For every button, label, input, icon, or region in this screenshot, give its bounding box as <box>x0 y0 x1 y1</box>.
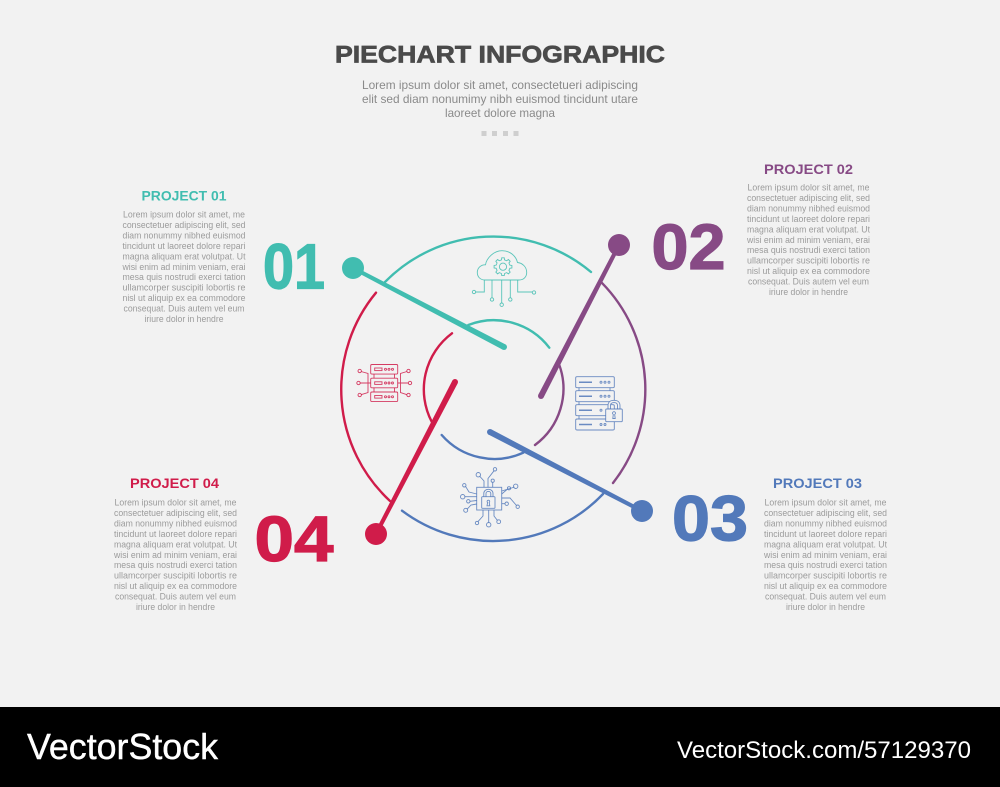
number 04: 04 <box>254 503 334 575</box>
text block: project 02: wisi enim ad minim veniam, erai <box>746 235 870 245</box>
text block: project 03: ullamcorper suscipiti lobortis re <box>764 571 887 581</box>
icon: server network <box>357 364 412 402</box>
blue arcs <box>402 435 603 541</box>
text block: project 03: consectetuer adipiscing elit, sed <box>764 508 887 518</box>
number 01: 01 <box>263 230 325 302</box>
text block: project 03: consequat. Duis autem vel eum <box>765 592 886 602</box>
pagination squares <box>482 131 518 136</box>
text block: project 04: consequat. Duis autem vel eum <box>115 592 236 602</box>
text block: project 04: mesa quis nostrudi exerci tation <box>114 560 237 570</box>
panel: project 03 <box>763 475 888 612</box>
text block: project 02: magna aliquam erat volutpat. Ut <box>747 224 871 234</box>
heading: project 03: PROJECT 03 <box>773 475 862 491</box>
text block: project 01: iriure dolor in hendre <box>144 314 224 324</box>
number 03: 03 <box>672 482 748 554</box>
text block: project 02 <box>746 182 871 297</box>
red arcs <box>341 293 452 501</box>
text block: project 01: Lorem ipsum dolor sit amet, me <box>123 210 245 220</box>
panel: project 04 <box>113 475 238 612</box>
pointer 02 <box>538 234 630 399</box>
text block: project 03: tincidunt ut laoreet dolore repari <box>764 529 887 539</box>
footer logo text: VectorStock <box>27 726 219 767</box>
text block: project 04: iriure dolor in hendre <box>136 602 215 612</box>
text block: project 02: mesa quis nostrudi exerci tation <box>747 245 870 255</box>
text block: project 04: tincidunt ut laoreet dolore repari <box>114 529 237 539</box>
text block: project 01: consequat. Duis autem vel eum <box>124 304 244 314</box>
icon: cloud with gear <box>472 251 536 306</box>
text block: project 01: magna aliquam erat volutpat. Ut <box>122 251 246 261</box>
text block: project 02: ullamcorper suscipiti lobortis re <box>747 256 870 266</box>
text block: project 02: iriure dolor in hendre <box>769 287 848 297</box>
heading: project 04: PROJECT 04 <box>130 475 219 491</box>
text block: project 02: diam nonummy nibhed euismod <box>747 203 870 213</box>
subtitle: Lorem ipsum dolor sit amet, consectetueri adipiscing <box>362 78 638 92</box>
text block: project 04: wisi enim ad minim veniam, erai <box>113 550 237 560</box>
text block: project 04: magna aliquam erat volutpat. Ut <box>114 539 238 549</box>
text block: project 03: Lorem ipsum dolor sit amet, me <box>764 498 887 508</box>
text block: project 03: iriure dolor in hendre <box>786 602 865 612</box>
text block: project 02: consectetuer adipiscing elit, sed <box>747 193 870 203</box>
text block: project 04: Lorem ipsum dolor sit amet, me <box>114 498 237 508</box>
text block: project 04: nisl ut aliquip ex ea commodore <box>114 581 237 591</box>
piechart rings <box>341 237 645 541</box>
number 02: 02 <box>652 211 726 283</box>
text block: project 03: wisi enim ad minim veniam, erai <box>763 550 887 560</box>
subtitle <box>362 78 638 120</box>
title: PIECHART INFOGRAPHIC <box>335 41 665 68</box>
panel: project 01 <box>122 188 246 324</box>
text block: project 01: tincidunt ut laoreet dolore repari <box>122 241 246 251</box>
text block: project 01: wisi enim ad minim veniam, erai <box>122 262 246 272</box>
text block: project 02: tincidunt ut laoreet dolore repari <box>747 214 870 224</box>
text block: project 02: consequat. Duis autem vel eum <box>748 277 869 287</box>
text block: project 03: diam nonummy nibhed euismod <box>764 518 887 528</box>
panel: project 02 <box>746 161 871 297</box>
purple arcs <box>535 283 645 483</box>
text block: project 03: nisl ut aliquip ex ea commodore <box>764 581 887 591</box>
heading: project 01: PROJECT 01 <box>142 188 227 204</box>
pointer 04 <box>365 379 458 545</box>
icon: locked server stack <box>576 377 622 430</box>
footer bar <box>0 707 1000 787</box>
text block: project 01: mesa quis nostrudi exerci tation <box>122 272 246 282</box>
footer url text: VectorStock.com/57129370 <box>677 737 971 764</box>
text block: project 03: mesa quis nostrudi exerci tation <box>764 560 887 570</box>
icon: circuit padlock <box>460 468 519 527</box>
subtitle: laoreet dolore magna <box>445 106 555 120</box>
subtitle: elit sed diam nonumimy nibh euismod tincidunt utare <box>362 92 638 106</box>
text block: project 01: ullamcorper suscipiti lobortis re <box>122 283 246 293</box>
pointer 01 <box>342 257 507 350</box>
pointer 03 <box>487 429 653 522</box>
text block: project 04: consectetuer adipiscing elit, sed <box>114 508 237 518</box>
text block: project 01 <box>122 210 246 324</box>
text block: project 02: nisl ut aliquip ex ea commodore <box>747 266 870 276</box>
heading: project 02: PROJECT 02 <box>764 161 853 177</box>
text block: project 04: ullamcorper suscipiti lobortis re <box>114 571 237 581</box>
text block: project 01: nisl ut aliquip ex ea commodore <box>122 293 246 303</box>
text block: project 01: diam nonummy nibhed euismod <box>122 230 246 240</box>
text block: project 04: diam nonummy nibhed euismod <box>114 518 237 528</box>
teal arcs <box>385 237 591 348</box>
text block: project 02: Lorem ipsum dolor sit amet, me <box>748 182 870 192</box>
text block: project 03 <box>763 498 888 612</box>
text block: project 04 <box>113 498 238 612</box>
text block: project 01: consectetuer adipiscing elit, sed <box>122 220 246 230</box>
text block: project 03: magna aliquam erat volutpat. Ut <box>764 539 888 549</box>
